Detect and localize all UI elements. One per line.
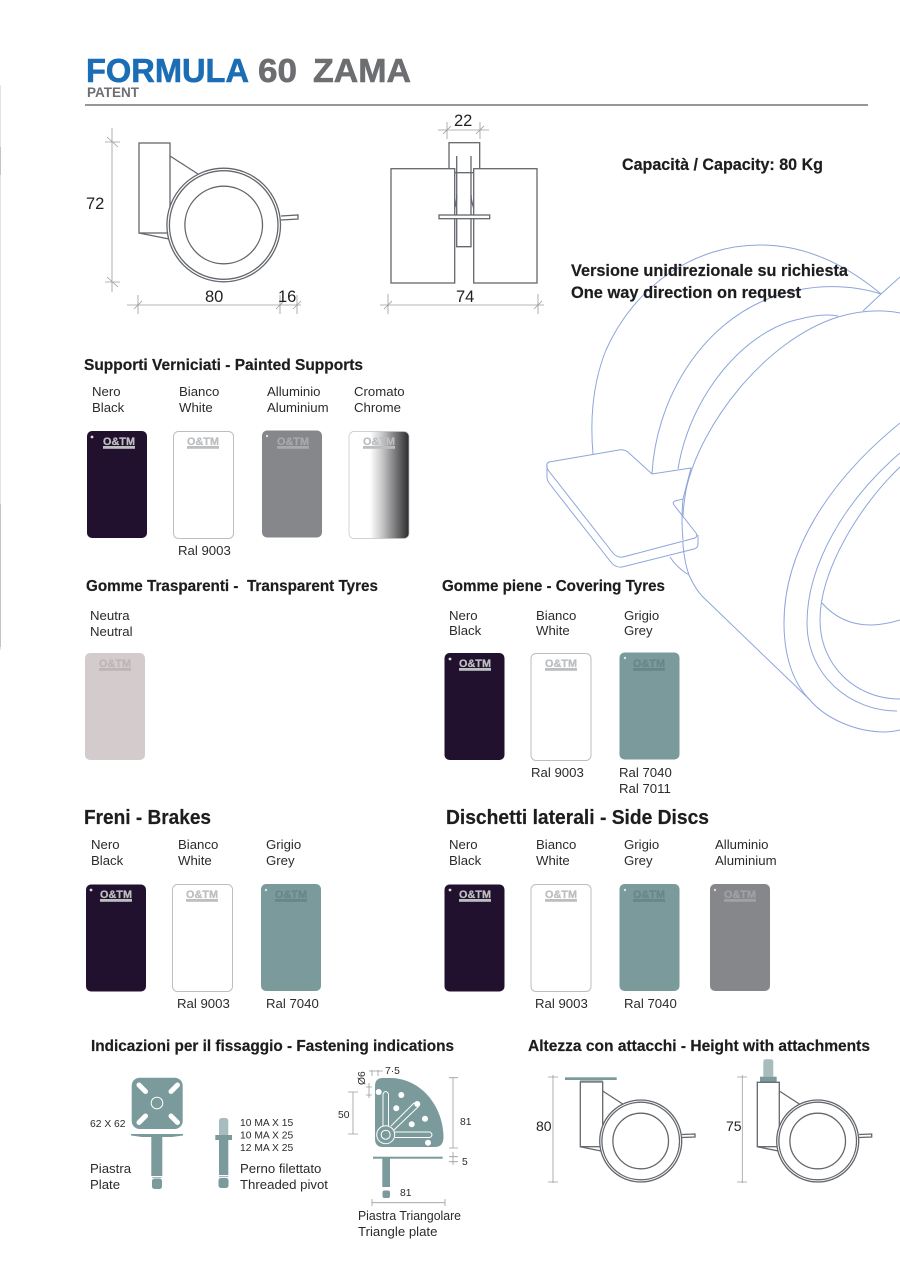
background wheel line illustration [547,245,900,732]
triangle plate fitting: 81 [460,1117,472,1128]
triangle plate fitting: Triangle plate [358,1224,437,1239]
triangle plate fitting: 5 [462,1157,468,1168]
swatch: grey: Ral 7040 [266,996,319,1011]
swatch: grey: Ral 7040 [624,996,677,1011]
heading: Supporti Verniciati - Painted Supports [84,357,363,374]
title: PATENT [87,85,140,100]
swatch: black: Black [92,400,125,415]
swatch: neutral: Neutral [90,624,133,639]
swatch: aluminium [710,837,777,991]
castor with threaded pivot [726,1059,872,1183]
swatch: grey: Grigio [624,837,659,852]
swatch: white: Ral 9003 [531,765,584,780]
threaded pivot [215,1118,328,1192]
swatch: aluminium: O&TM [277,436,309,448]
swatch: black: O&TM [100,889,132,901]
threaded pivot: 10 MA X 15 [240,1118,294,1129]
swatch: aluminium [262,384,329,538]
swatch: white: Ral 9003 [177,996,230,1011]
swatch: black: Black [449,623,482,638]
swatch: white: Bianco [536,608,576,623]
swatch: white: Ral 9003 [535,996,588,1011]
swatch: white: White [536,853,570,868]
swatch: neutral [85,608,145,760]
swatch: black: Nero [92,384,121,399]
swatch: white: White [178,853,212,868]
castor with plate: 80 [536,1118,552,1134]
swatch: grey: Ral 7011 [619,781,671,796]
title: 60 [258,52,297,89]
swatch: neutral: O&TM [99,658,131,670]
swatch: black: Nero [449,837,478,852]
swatch: grey [261,837,321,1011]
panel: fastening indications [90,1038,472,1239]
swatch: aluminium: Alluminio [715,837,769,852]
swatch: white: O&TM [187,436,219,448]
swatch: grey: O&TM [633,658,665,670]
swatch: black [444,608,504,760]
swatch: black: Nero [91,837,120,852]
swatch: black [444,837,504,992]
swatch: black: Black [91,853,124,868]
swatch: grey: Grey [624,853,653,868]
panel: brakes [84,807,321,1011]
swatch: aluminium: Aluminium [267,400,329,415]
swatch: grey [620,837,680,1011]
plate fitting: 62 X 62 [90,1119,126,1130]
heading: Dischetti laterali - Side Discs [446,807,709,829]
one way direction note [571,261,849,302]
swatch: aluminium: Aluminium [715,853,777,868]
swatch: grey: Ral 7040 [619,765,672,780]
swatch: grey: Grigio [266,837,301,852]
panel: side discs [444,807,777,1011]
panel: covering tyres [442,578,680,796]
swatch: grey: Grey [624,623,653,638]
heading: Gomme Trasparenti - Transparent Tyres [86,578,378,595]
swatch: white [531,608,591,780]
panel: painted supports: O&TM [363,436,395,448]
panel: painted supports [84,357,409,558]
swatch: grey: Grey [266,853,295,868]
title [86,52,411,100]
panel: height with attachments [528,1038,872,1183]
swatch: white: White [536,623,570,638]
swatch: white: O&TM [186,889,218,901]
mounting plate outline [547,450,698,575]
triangle plate fitting: 50 [338,1110,350,1121]
triangle plate fitting [338,1066,472,1239]
swatch: grey: O&TM [275,889,307,901]
heading: Gomme piene - Covering Tyres [442,578,665,595]
threaded pivot: 10 MA X 25 [240,1130,294,1142]
swatch: white [172,837,232,1011]
panel: transparent tyres [85,578,378,760]
castor with plate [536,1075,695,1183]
triangle plate fitting: 81 [400,1188,412,1199]
side view technical drawing [86,128,301,314]
swatch: white: Bianco [179,384,219,399]
swatch: aluminium: O&TM [724,889,756,901]
swatch: white: Bianco [536,837,576,852]
plate fitting: Piastra [90,1161,132,1176]
swatch: white: O&TM [545,889,577,901]
castor with threaded pivot: 75 [726,1118,742,1134]
swatch: grey: O&TM [633,889,665,901]
swatch: black: O&TM [459,889,491,901]
swatch: neutral: Neutra [90,608,130,623]
swatch: black: Black [449,853,482,868]
heading: Indicazioni per il fissaggio - Fastening indications [91,1038,454,1055]
one way direction note: One way direction on request [571,283,801,302]
swatch: black: Nero [449,608,478,623]
side view technical drawing: 72 [86,195,104,213]
threaded pivot: 12 MA X 25 [240,1143,294,1154]
swatch: white: Bianco [178,837,218,852]
capacity text: Capacità / Capacity: 80 Kg [622,155,823,174]
threaded pivot: Perno filettato [240,1161,321,1176]
front view technical drawing: 74 [456,288,474,306]
swatch: white [174,384,234,558]
swatch: black: O&TM [459,658,491,670]
panel: painted supports: Cromato [354,384,405,399]
threaded pivot: Threaded pivot [240,1177,328,1192]
swatch: white: Ral 9003 [178,543,231,558]
side view technical drawing: 80 [205,288,223,306]
plate fitting: Plate [90,1177,120,1192]
swatch: white [531,837,591,1011]
swatch: black [87,384,147,538]
title: ZAMA [313,52,411,89]
swatch: white: White [179,400,213,415]
swatch: black: O&TM [103,436,135,448]
swatch: aluminium: Alluminio [267,384,321,399]
panel: painted supports: Chrome [354,400,401,415]
heading: Freni - Brakes [84,807,211,829]
swatch: grey: Grigio [624,608,659,623]
triangle plate fitting: Piastra Triangolare [358,1208,461,1223]
front view technical drawing: 22 [454,112,472,130]
swatch: black [86,837,146,992]
plate fitting [90,1078,183,1192]
swatch: white: O&TM [545,658,577,670]
one way direction note: Versione unidirezionale su richiesta [571,261,849,280]
triangle plate fitting: 7·5 [385,1066,400,1077]
side view technical drawing: 16 [278,288,296,306]
triangle plate fitting: Ø6 [357,1071,368,1085]
title: FORMULA [86,52,249,89]
heading: Altezza con attacchi - Height with attachments [528,1038,870,1055]
swatch: grey [619,608,680,796]
front view technical drawing [380,112,544,314]
